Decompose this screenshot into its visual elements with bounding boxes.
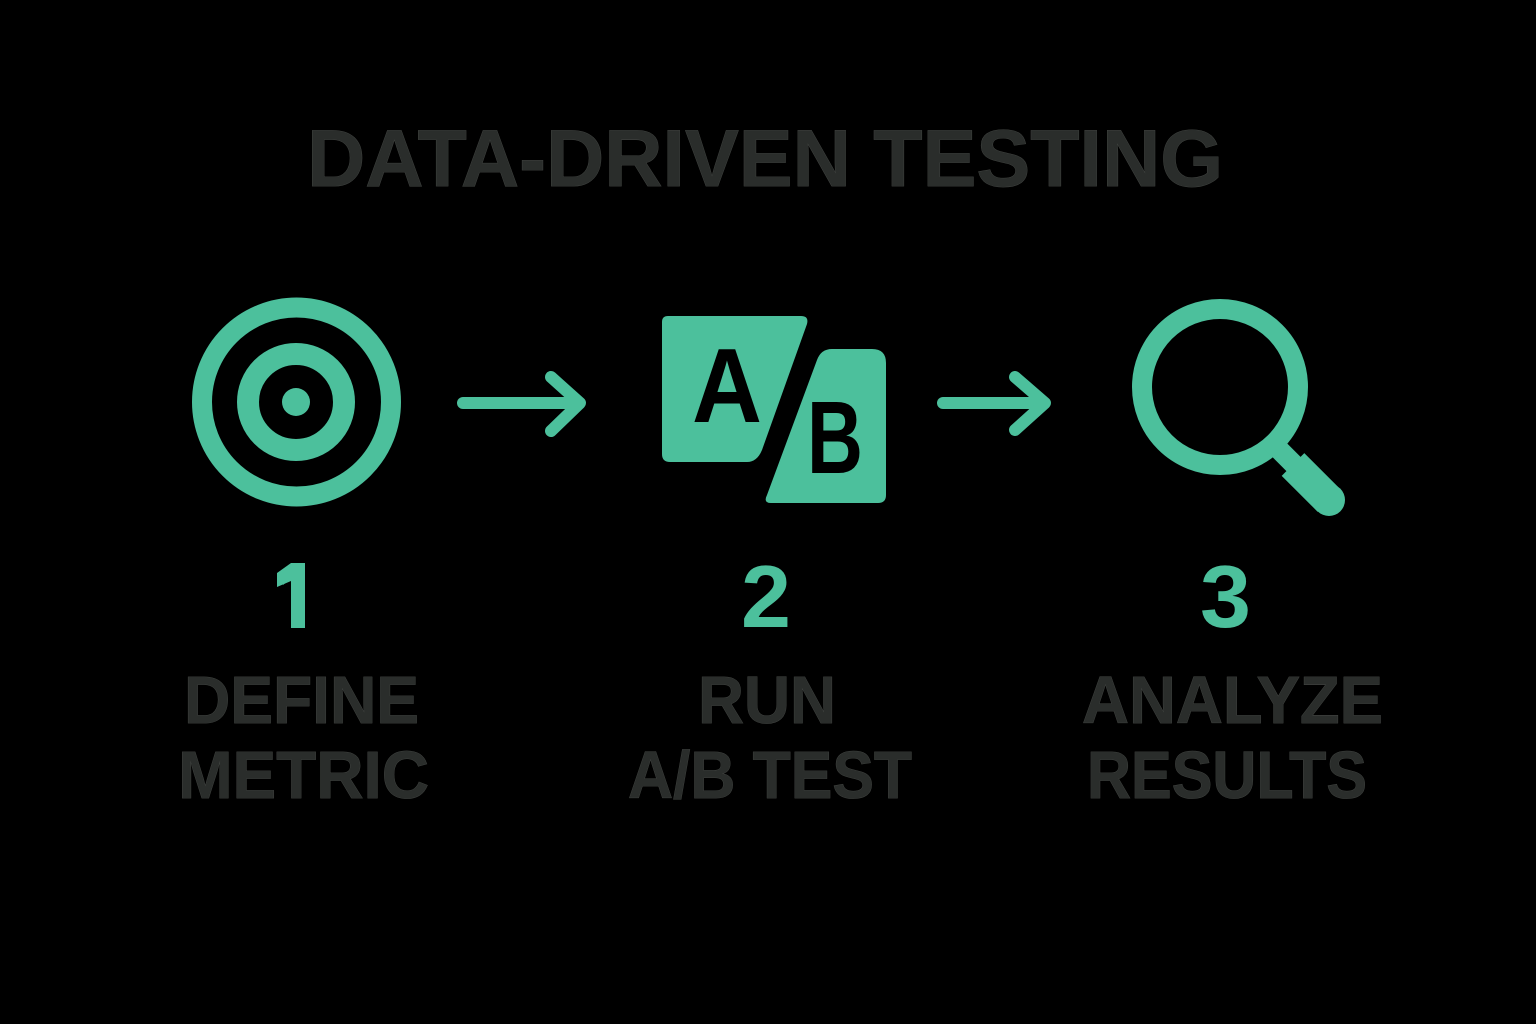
step 2: run a/b test — [628, 316, 912, 813]
label: run a/b test — [628, 663, 912, 813]
arrow 1 to 2 — [463, 377, 580, 431]
card a — [662, 316, 807, 462]
step 1: define metric — [178, 308, 429, 813]
number 1: 1 — [278, 546, 318, 648]
icon: magnifying glass — [1142, 309, 1345, 516]
number 3: 3 — [1200, 547, 1251, 646]
arrow 2 to 3 — [943, 377, 1045, 430]
label: define metric — [178, 663, 429, 813]
label: define metric: METRIC — [178, 738, 429, 813]
label: run a/b test: A/B TEST — [628, 738, 912, 813]
label: run a/b test: RUN — [698, 663, 836, 738]
label: analyze results — [1082, 663, 1383, 813]
step 3: analyze results — [1082, 309, 1383, 813]
letter a: A — [692, 327, 762, 445]
title: DATA-DRIVEN TESTING — [307, 114, 1223, 204]
icon: target — [202, 308, 391, 496]
letter b: B — [807, 380, 863, 495]
number 2: 2 — [741, 547, 791, 646]
label: analyze results: ANALYZE — [1082, 663, 1383, 738]
icon: a/b cards — [662, 316, 886, 503]
label: analyze results: RESULTS — [1087, 738, 1367, 813]
label: define metric: DEFINE — [184, 663, 419, 738]
number 1 — [277, 563, 305, 628]
card b — [766, 349, 886, 503]
